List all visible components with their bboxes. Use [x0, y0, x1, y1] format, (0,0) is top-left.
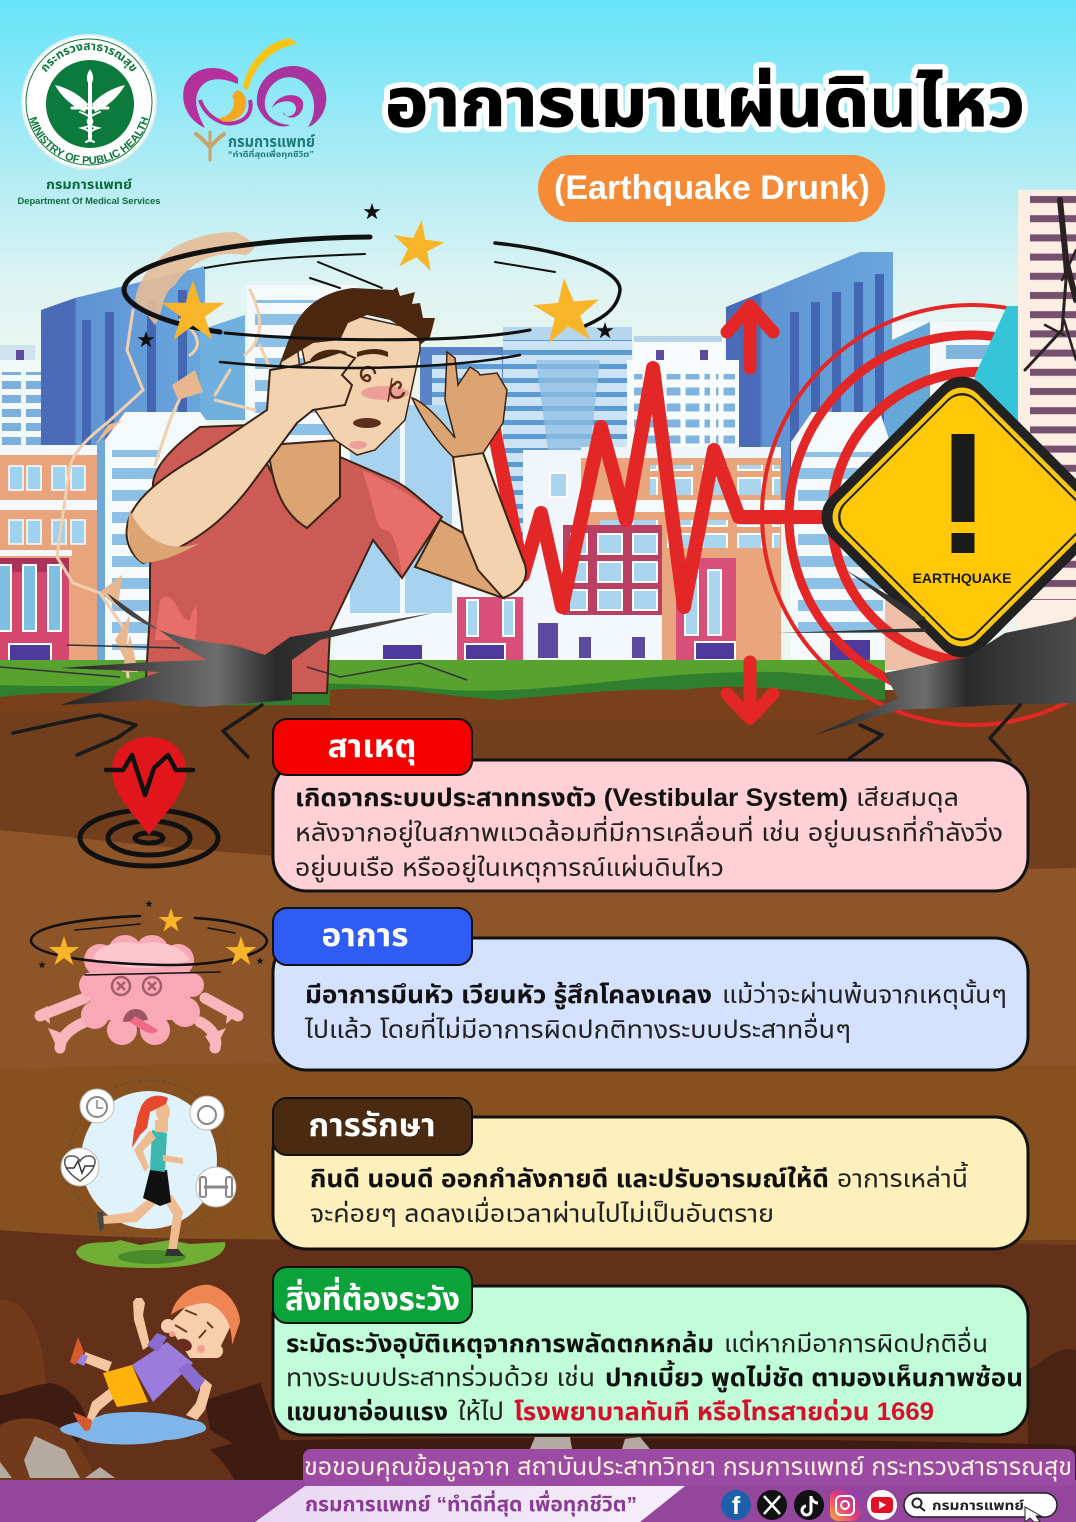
logo: 83 years Department of Medical Services — [183, 38, 326, 160]
left ground crack over the man — [0, 593, 467, 757]
icon: runner with health icons — [61, 1080, 236, 1268]
text: department English name: Department Of Medical Services — [18, 196, 160, 207]
logo: Ministry of Public Health seal: กระทรวงสาธารณสุข — [42, 42, 137, 72]
card: treatment — [273, 1117, 1028, 1249]
logo: 83 years Department of Medical Services: กรมการแพทย์ — [228, 134, 315, 151]
subtitle pill — [538, 155, 885, 222]
right hand — [412, 352, 507, 457]
treatment text — [310, 1161, 968, 1228]
precautions text: โรงพยาบาลทันที หรือโทรสายด่วน 1669 — [514, 1398, 934, 1426]
icon: X — [757, 1490, 787, 1520]
cause text — [295, 784, 1003, 883]
title: อาการเมาแผ่นดินไหว — [385, 65, 1025, 141]
title: อาการเมาแผ่นดินไหว — [385, 65, 1025, 141]
panel: symptoms — [273, 908, 1028, 1070]
teal wedge — [960, 306, 1018, 520]
precautions text: แต่หากมีอาการผิดปกติอื่น — [724, 1326, 988, 1358]
earthquake warning sign: EARTHQUAKE — [912, 570, 1012, 586]
tab: cause: สาเหตุ — [328, 728, 416, 765]
tall striped building right edge — [1018, 190, 1076, 690]
panel: cause — [273, 719, 1028, 891]
icon: TikTok — [794, 1490, 824, 1520]
light blue block — [200, 315, 245, 420]
card: precautions — [273, 1286, 1028, 1435]
symptoms text: มีอาการมึนหัว เวียนหัว รู้สึกโคลงเคลง — [305, 981, 712, 1010]
rose building next to the man — [457, 597, 523, 660]
black stars — [137, 203, 614, 347]
icon: Facebook: f — [732, 1492, 741, 1520]
treatment text: กินดี นอนดี ออกกำลังกายดี และปรับอารมณ์ให้ดี — [310, 1165, 829, 1193]
symptoms text: แม้ว่าจะผ่านพ้นจากเหตุนั้นๆ — [722, 978, 1007, 1010]
far-right white block — [892, 322, 1004, 440]
logo: Ministry of Public Health seal — [21, 34, 157, 170]
left orange building — [0, 445, 100, 662]
arrow: up — [727, 306, 773, 368]
panel: precautions — [273, 1267, 1028, 1435]
green grass strip — [0, 660, 885, 720]
background: sky — [0, 0, 1076, 700]
red seismograph line — [493, 368, 830, 607]
symptoms text: ไปแล้ว โดยที่ไม่มีอาการผิดปกติทางระบบประสาทอื่นๆ — [304, 1012, 851, 1044]
footer slanted slogan — [255, 1486, 685, 1522]
tab: cause — [273, 719, 472, 775]
arrow: down — [727, 662, 773, 718]
shirt highlights — [155, 470, 440, 640]
centre glass tower — [503, 327, 632, 557]
shirt — [145, 425, 442, 693]
wall crack — [1025, 200, 1076, 370]
tab: precautions: สิ่งที่ต้องระวัง — [285, 1276, 460, 1317]
social media icons — [721, 1490, 897, 1521]
right blue tower — [726, 252, 893, 500]
centre white building — [627, 336, 739, 460]
icon: boy slipping on a puddle — [60, 1285, 240, 1444]
tab: precautions — [273, 1267, 472, 1323]
white tower left of the man — [247, 285, 357, 465]
search box — [904, 1493, 1057, 1522]
tab: treatment: การรักษา — [308, 1107, 436, 1143]
precautions text: แขนขาอ่อนแรง — [286, 1398, 448, 1426]
blue block behind the head — [420, 347, 505, 417]
mouth — [353, 418, 381, 428]
spiral eyes and mouth — [361, 367, 404, 402]
precautions text: ให้ไป — [458, 1398, 504, 1426]
tab: symptoms: อาการ — [322, 917, 408, 953]
icon: YouTube — [867, 1490, 897, 1520]
city skyline buildings — [0, 190, 1076, 690]
hair — [282, 287, 435, 362]
card: symptoms — [273, 938, 1028, 1070]
blush — [349, 386, 409, 449]
logo: 83 years Department of Medical Services: “ทำดีที่สุดเพื่อทุกชีวิต” — [228, 148, 314, 159]
cause text: เกิดจากระบบประสาททรงตัว (Vestibular System) — [295, 784, 848, 812]
icon: Instagram — [830, 1490, 860, 1521]
card: cause — [273, 760, 1028, 891]
orange building — [581, 447, 781, 660]
cause text: อยู่บนเรือ หรืออยู่ในเหตุการณ์แผ่นดินไหว — [295, 854, 724, 883]
logo: Ministry of Public Health seal: MINISTRY OF PUBLIC HEALTH — [29, 116, 149, 164]
right ground crack — [777, 570, 1076, 760]
left arm — [127, 352, 355, 563]
dizzy man — [57, 203, 620, 693]
text: department Thai name: กรมการแพทย์ — [46, 177, 132, 192]
left white striped building — [97, 412, 215, 662]
cause text: หลังจากอยู่ในสภาพแวดล้อมที่มีการเคลื่อนที่ เช่น อยู่บนรถที่กำลังวิ่ง — [295, 815, 1003, 848]
neck — [268, 440, 340, 528]
right white striped building — [791, 412, 890, 660]
subtitle pill: (Earthquake Drunk) — [554, 169, 870, 207]
treatment text: อาการเหล่านี้ — [837, 1161, 968, 1193]
red shock rings — [762, 305, 1076, 725]
right forearm — [453, 453, 526, 598]
tab: treatment — [273, 1098, 472, 1155]
rose building with door — [662, 555, 757, 660]
far-left white building — [0, 345, 58, 450]
precautions text: ระมัดระวังอุบัติเหตุจากการพลัดตกหกล้ม — [286, 1330, 714, 1359]
hand afterimage ghost — [57, 232, 275, 677]
symptoms text — [304, 978, 1007, 1044]
pink building — [536, 525, 662, 660]
rocks — [0, 1436, 650, 1478]
right upper arm — [415, 520, 503, 598]
credit banner: ขอขอบคุณข้อมูลจาก สถาบันประสาทวิทยา กรมการแพทย์ กระทรวงสาธารณสุข — [304, 1453, 1072, 1482]
left elbow shading — [128, 510, 200, 563]
earthquake warning sign — [810, 365, 1076, 669]
eyebrows — [310, 349, 388, 360]
white building with blue panels behind the man — [335, 405, 480, 660]
tab: symptoms — [273, 908, 472, 965]
dizzy halo — [124, 237, 620, 368]
precautions text: ทางระบบประสาทร่วมด้วย เช่น — [286, 1364, 595, 1392]
right low pink striped block — [885, 600, 965, 670]
ear — [280, 325, 300, 370]
precautions text: ปากเบี้ยว พูดไม่ชัด ตามองเห็นภาพซ้อน — [605, 1360, 1023, 1393]
icon: red location pin with heartbeat — [80, 737, 218, 866]
gold stars — [162, 217, 603, 344]
footer slanted slogan: กรมการแพทย์ “ทำดีที่สุด เพื่อทุกชีวิต” — [305, 1490, 637, 1516]
ground: soil layers — [0, 690, 1076, 1522]
search box: กรมการแพทย์ — [932, 1498, 1024, 1513]
panel: treatment — [273, 1098, 1028, 1249]
precautions text — [286, 1326, 1023, 1426]
treatment text: จะค่อยๆ ลดลงเมื่อเวลาผ่านไปไม่เป็นอันตราย — [310, 1196, 774, 1228]
face — [300, 310, 420, 455]
icon: dizzy brain — [31, 900, 267, 1050]
cause text: เสียสมดุล — [856, 784, 959, 813]
footer purple band — [0, 1480, 1076, 1522]
icon: Facebook — [721, 1490, 751, 1520]
left blue tower — [41, 266, 205, 450]
centre low white building — [523, 450, 581, 660]
